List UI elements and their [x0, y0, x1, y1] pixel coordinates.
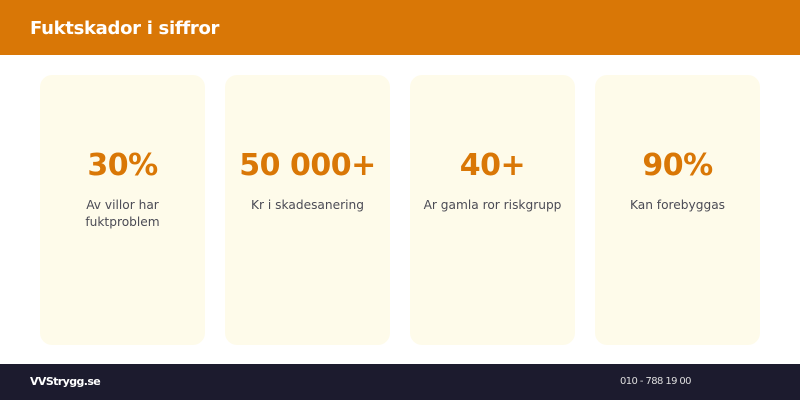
stat 2 [239, 148, 376, 212]
stat 2: Kr i skadesanering [251, 198, 364, 212]
stat 1: fuktproblem [85, 215, 160, 229]
phone: 010 - 788 19 00 [620, 376, 691, 387]
card: 40+ [410, 75, 575, 345]
header [0, 0, 800, 55]
stat 1: Av villor har [86, 198, 159, 212]
stat 4: Kan forebyggas [630, 198, 725, 212]
title: Fuktskador i siffror [30, 18, 219, 39]
stat 4: 90% [642, 148, 713, 183]
footer [0, 364, 800, 400]
card: 90% [595, 75, 760, 345]
stat 3: 40+ [460, 148, 525, 183]
stat 4 [630, 148, 725, 212]
stat 3 [424, 148, 561, 212]
stat 2: 50 000+ [239, 148, 376, 183]
card: 50 000+ [225, 75, 390, 345]
stat 1 [85, 148, 160, 229]
stat 1: 30% [87, 148, 158, 183]
card: 30% [40, 75, 205, 345]
stat 3: Ar gamla ror riskgrupp [424, 198, 561, 212]
brand: VVStrygg.se [30, 375, 100, 388]
